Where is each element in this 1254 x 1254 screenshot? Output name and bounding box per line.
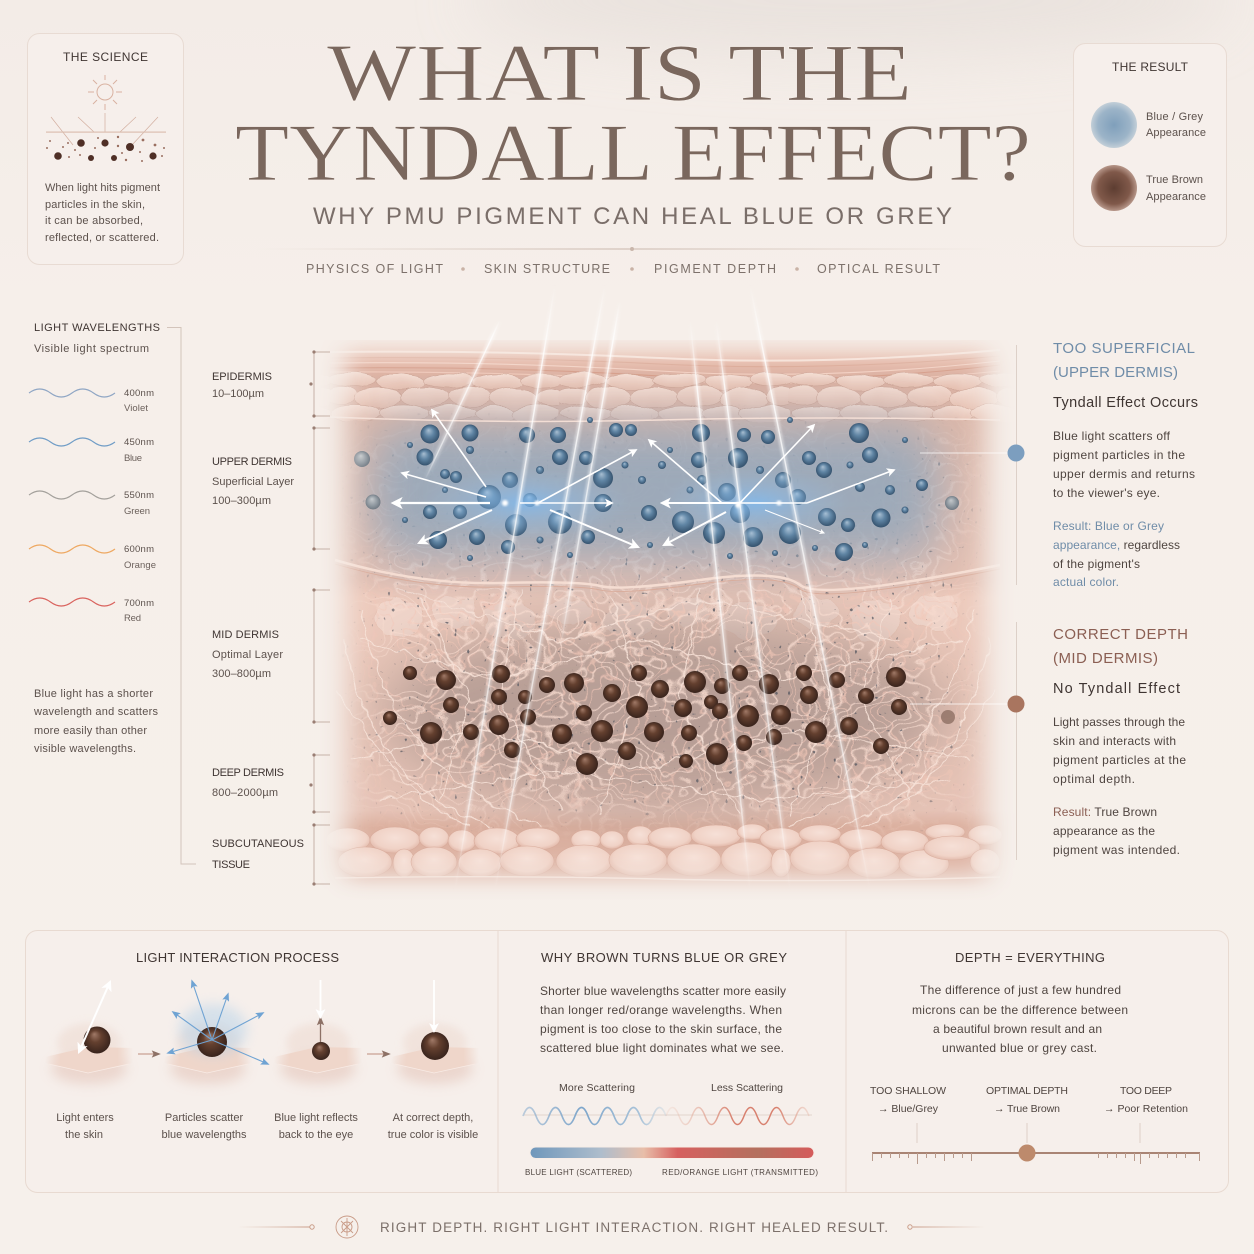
result text: appearance, regardless bbox=[1053, 538, 1180, 552]
body text: unwanted blue or grey cast. bbox=[942, 1041, 1097, 1055]
glow: blue scattering clusters bbox=[434, 471, 835, 536]
text panel: too superficial bbox=[1053, 340, 1198, 589]
depth labels: TOO DEEP bbox=[1120, 1085, 1172, 1097]
wave: 550nm green: Green bbox=[124, 506, 150, 517]
label: subcutaneous tissue bbox=[212, 838, 304, 871]
skin layer: mid dermis shading bbox=[380, 617, 950, 807]
label: subcutaneous tissue: TISSUE bbox=[212, 859, 250, 871]
skin layer: epidermis cells bbox=[320, 373, 1020, 421]
pigment particles: upper dermis grey bbox=[354, 451, 959, 510]
heading: too superficial: (UPPER DERMIS) bbox=[1053, 364, 1178, 381]
swatch: blue grey appearance bbox=[1091, 102, 1137, 148]
swatch: true brown appearance bbox=[1091, 165, 1137, 211]
wave: 600nm orange: Orange bbox=[124, 560, 156, 571]
topic tags: OPTICAL RESULT bbox=[817, 262, 940, 276]
step 2: particles scatter: Particles scatter bbox=[165, 1112, 243, 1124]
result text: actual color. bbox=[1053, 575, 1119, 589]
step 1: light enters: Light enters bbox=[56, 1112, 114, 1124]
step 3: blue light reflects: Blue light reflects bbox=[274, 1112, 358, 1124]
labels: scattering bbox=[559, 1082, 783, 1094]
label: deep dermis: 800–2000µm bbox=[212, 787, 278, 799]
label: true brown: True Brown bbox=[1146, 174, 1203, 186]
body text: Blue light scatters off bbox=[1053, 429, 1171, 443]
heading: correct depth: CORRECT DEPTH bbox=[1053, 626, 1188, 643]
text: wavelength note: wavelength and scatters bbox=[33, 706, 158, 718]
wave: 700nm red: 700nm bbox=[124, 598, 154, 609]
fat cells: subcutaneous tissue bbox=[326, 824, 1002, 878]
body text: scattered blue light dominates what we see. bbox=[540, 1041, 784, 1055]
wave: 400nm violet: Violet bbox=[124, 403, 148, 414]
light rays bbox=[425, 285, 870, 890]
label: mid dermis: 300–800µm bbox=[212, 668, 271, 680]
subtitle: WHY PMU PIGMENT CAN HEAL BLUE OR GREY bbox=[313, 203, 952, 230]
icon: sun bbox=[88, 75, 122, 110]
topic tags: PHYSICS OF LIGHT bbox=[306, 262, 443, 276]
callout line and markers bbox=[910, 345, 1024, 860]
wave: 600nm orange: 600nm bbox=[124, 544, 154, 555]
wave: 450nm blue bbox=[29, 437, 154, 464]
fibres: sweeping collagen strands bbox=[340, 590, 995, 830]
title: WHAT IS THE bbox=[327, 27, 912, 118]
footer bbox=[238, 1216, 985, 1238]
text panel: correct depth bbox=[1053, 626, 1188, 857]
text: wavelength note: more easily than other bbox=[34, 725, 147, 737]
topic tags bbox=[306, 262, 940, 276]
body text: pigment is too close to the skin surface, the bbox=[540, 1022, 782, 1036]
heading: too superficial bbox=[1053, 340, 1195, 381]
step 3: blue light reflects: back to the eye bbox=[279, 1129, 353, 1141]
depth scale bbox=[872, 1123, 1200, 1164]
label: mid dermis bbox=[212, 629, 283, 680]
label: epidermis: 10–100µm bbox=[212, 388, 264, 400]
layer brackets bbox=[309, 350, 330, 886]
body text: a beautiful brown result and an bbox=[933, 1022, 1102, 1036]
label: upper dermis bbox=[212, 456, 294, 507]
label: epidermis bbox=[212, 371, 272, 400]
result text: Result: True Brown bbox=[1053, 805, 1157, 819]
result text bbox=[1053, 805, 1180, 857]
step 4: true color visible: At correct depth, bbox=[393, 1112, 473, 1124]
skin layer: stratum corneum bbox=[330, 350, 1000, 383]
arrows: scattered blue light bbox=[393, 410, 894, 547]
sparkles bbox=[502, 500, 782, 508]
icon: logo emblem bbox=[336, 1216, 358, 1238]
step 2: particles scatter: blue wavelengths bbox=[161, 1129, 247, 1141]
text: science explanation: it can be absorbed, bbox=[45, 215, 143, 227]
label: deep dermis: DEEP DERMIS bbox=[212, 767, 284, 779]
labels: scattering: Less Scattering bbox=[711, 1082, 783, 1094]
boundary lines bbox=[330, 417, 1000, 594]
text: science explanation: When light hits pigment bbox=[45, 182, 160, 194]
chart: wave comparison bbox=[523, 1108, 812, 1124]
label: upper dermis: 100–300µm bbox=[212, 495, 271, 507]
body text: skin and interacts with bbox=[1053, 734, 1176, 748]
body text: pigment particles in the bbox=[1053, 448, 1185, 462]
heading: too superficial: TOO SUPERFICIAL bbox=[1053, 340, 1195, 357]
text: science explanation bbox=[45, 182, 160, 244]
body text: Shorter blue wavelengths scatter more easily bbox=[540, 984, 786, 998]
label: blue grey bbox=[1146, 111, 1206, 139]
text: science explanation: particles in the skin, bbox=[45, 199, 145, 211]
body text: microns can be the difference between bbox=[912, 1003, 1128, 1017]
heading: light wavelengths: LIGHT WAVELENGTHS bbox=[34, 322, 160, 334]
marker: blue bbox=[1008, 444, 1024, 462]
label: upper dermis: UPPER DERMIS bbox=[212, 456, 292, 468]
label: subcutaneous tissue: SUBCUTANEOUS bbox=[212, 838, 304, 850]
heading: correct depth: (MID DERMIS) bbox=[1053, 650, 1158, 667]
body text: than longer red/orange wavelengths. When bbox=[540, 1003, 782, 1017]
wave: 600nm orange bbox=[29, 544, 156, 571]
depth labels: → Poor Retention bbox=[1104, 1103, 1188, 1115]
specks bbox=[320, 420, 1020, 840]
topic tags: PIGMENT DEPTH bbox=[654, 262, 776, 276]
skin layer: dermal lobules bbox=[376, 594, 959, 640]
step 2: particles scatter bbox=[161, 981, 268, 1141]
wave: 550nm green bbox=[29, 490, 154, 517]
subheading: Visible light spectrum bbox=[34, 343, 149, 355]
label: true brown bbox=[1146, 174, 1206, 203]
body text: to the viewer's eye. bbox=[1053, 486, 1160, 500]
fibres: dermis network bbox=[375, 568, 958, 818]
label: blue grey: Blue / Grey bbox=[1146, 111, 1204, 123]
heading: DEPTH = EVERYTHING bbox=[955, 950, 1105, 965]
wave: 450nm blue: 450nm bbox=[124, 437, 154, 448]
pigment particles: mid dermis brown bbox=[383, 665, 907, 775]
result text: of the pigment's bbox=[1053, 557, 1140, 571]
label: mid dermis: MID DERMIS bbox=[212, 629, 279, 641]
section: why brown turns blue or grey bbox=[523, 950, 818, 1177]
panel: the result bbox=[1074, 44, 1226, 246]
step 1: light enters: the skin bbox=[65, 1129, 103, 1141]
heading: WHY BROWN TURNS BLUE OR GREY bbox=[541, 950, 787, 965]
body text: Light passes through the bbox=[1053, 715, 1185, 729]
heading: LIGHT INTERACTION PROCESS bbox=[136, 950, 339, 965]
bottom panel bbox=[26, 930, 1228, 1192]
panel: light wavelengths bbox=[29, 322, 196, 864]
colour bar bbox=[530, 1147, 814, 1158]
labels: scattering: More Scattering bbox=[559, 1082, 635, 1094]
tagline: RIGHT DEPTH. RIGHT LIGHT INTERACTION. RIGHT HEALED RESULT. bbox=[380, 1220, 888, 1235]
heading: correct depth bbox=[1053, 626, 1188, 667]
label: mid dermis: Optimal Layer bbox=[212, 649, 283, 661]
title: TYNDALL EFFECT? bbox=[235, 107, 1031, 198]
result text: appearance as the bbox=[1053, 824, 1155, 838]
step 3: blue light reflects bbox=[274, 980, 362, 1141]
text: wavelength note: Blue light has a shorter bbox=[34, 688, 153, 700]
label: blue grey: Appearance bbox=[1146, 127, 1206, 139]
divider bbox=[255, 247, 995, 251]
text: science explanation: reflected, or scattered. bbox=[45, 232, 159, 244]
arrow bbox=[138, 1053, 159, 1055]
section: light interaction process bbox=[45, 950, 479, 1141]
label: deep dermis bbox=[212, 767, 284, 799]
bracket bbox=[167, 328, 196, 864]
chart: skin cross-section illustration bbox=[320, 285, 1020, 900]
arrow bbox=[367, 1053, 389, 1055]
label: epidermis: EPIDERMIS bbox=[212, 371, 272, 383]
marker: brown bbox=[1008, 696, 1024, 712]
body text bbox=[912, 983, 1128, 1055]
text: wavelength note: visible wavelengths. bbox=[34, 743, 136, 755]
depth labels: → True Brown bbox=[994, 1103, 1060, 1115]
depth labels bbox=[870, 1085, 1188, 1115]
body text: upper dermis and returns bbox=[1053, 467, 1195, 481]
heading: the result: THE RESULT bbox=[1112, 60, 1189, 74]
text: wavelength note bbox=[33, 688, 158, 755]
pigment particles: upper dermis blue bbox=[402, 417, 928, 561]
body text: optimal depth. bbox=[1053, 772, 1135, 786]
step 4: true color visible bbox=[388, 980, 479, 1141]
bar labels: BLUE LIGHT (SCATTERED) bbox=[525, 1168, 632, 1177]
body text bbox=[1053, 429, 1195, 500]
body text bbox=[1053, 715, 1186, 786]
step 1: light enters bbox=[45, 982, 133, 1141]
title bbox=[235, 27, 1031, 198]
body text: pigment particles at the bbox=[1053, 753, 1186, 767]
result text: Result: Blue or Grey bbox=[1053, 519, 1164, 533]
bar labels: RED/ORANGE LIGHT (TRANSMITTED) bbox=[662, 1168, 818, 1177]
subheading: tyndall effect occurs: Tyndall Effect Occurs bbox=[1053, 395, 1198, 411]
label: upper dermis: Superficial Layer bbox=[212, 476, 294, 488]
depth labels: TOO SHALLOW bbox=[870, 1085, 946, 1097]
panel: the science bbox=[28, 34, 184, 264]
body text: The difference of just a few hundred bbox=[920, 983, 1121, 997]
result text bbox=[1053, 519, 1180, 589]
wave: 700nm red: Red bbox=[124, 613, 141, 624]
wave: 700nm red bbox=[29, 598, 154, 624]
skin layer labels bbox=[212, 371, 304, 871]
skin layer: upper dermis blue zone bbox=[370, 425, 940, 560]
label: true brown: Appearance bbox=[1146, 191, 1206, 203]
depth labels: → Blue/Grey bbox=[878, 1103, 939, 1115]
wave: 550nm green: 550nm bbox=[124, 490, 154, 501]
result text: pigment was intended. bbox=[1053, 843, 1180, 857]
wave: 400nm violet: 400nm bbox=[124, 388, 154, 399]
subheading: no tyndall effect: No Tyndall Effect bbox=[1053, 681, 1180, 697]
step 4: true color visible: true color is visible bbox=[388, 1129, 478, 1141]
bar labels bbox=[525, 1168, 818, 1177]
depth labels: OPTIMAL DEPTH bbox=[986, 1085, 1068, 1097]
diagram: pigment particles scattering light bbox=[46, 113, 166, 162]
wave: 400nm violet bbox=[29, 388, 154, 414]
heading: the science: THE SCIENCE bbox=[63, 50, 148, 64]
body text bbox=[540, 984, 786, 1055]
section: depth = everything bbox=[870, 950, 1200, 1164]
topic tags: SKIN STRUCTURE bbox=[484, 262, 610, 276]
wave: 450nm blue: Blue bbox=[124, 453, 142, 464]
